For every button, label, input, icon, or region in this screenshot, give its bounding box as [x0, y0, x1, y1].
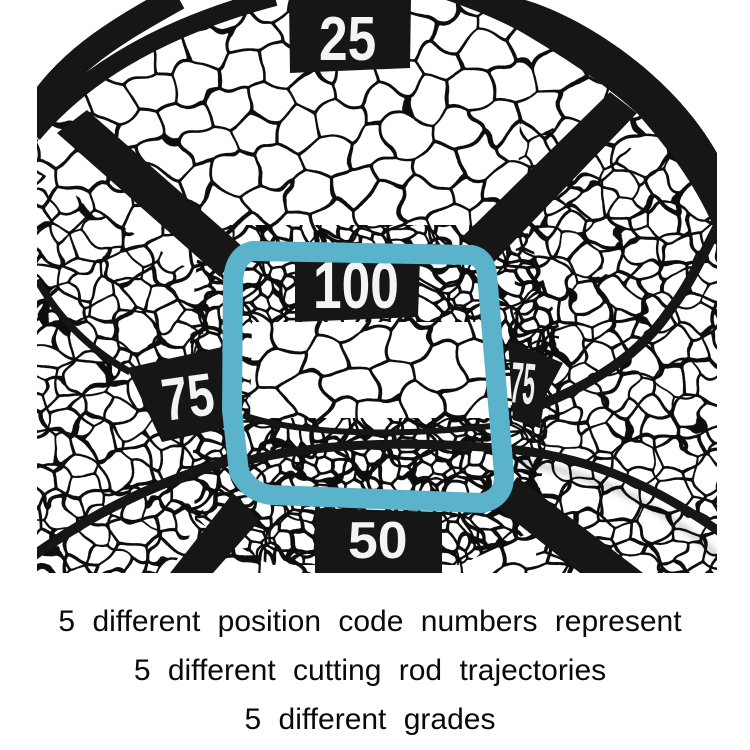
- outer hoop: top left: [30, 0, 275, 134]
- hoop: middle left: [37, 280, 130, 372]
- strap: top right: [462, 92, 637, 263]
- outer hoop: top right: [440, 0, 717, 235]
- label: 25: 25: [319, 5, 376, 74]
- label: 25: [289, 0, 411, 74]
- label: 100: [295, 262, 420, 322]
- label: 75 right: [508, 340, 563, 428]
- strap: bottom right: [497, 477, 643, 573]
- caption line 3: 5 different grades: [245, 703, 495, 736]
- hoop: middle right: [540, 222, 720, 405]
- label: 100: 100: [313, 248, 399, 322]
- caption line 1: 5 different position code numbers represent: [58, 605, 682, 638]
- label: 50: 50: [348, 512, 408, 570]
- dense tangled mesh around target: [190, 225, 560, 565]
- caption line 2: 5 different cutting rod trajectories: [134, 654, 606, 687]
- strap: bottom left: [170, 493, 260, 573]
- strap: top left: [57, 110, 243, 277]
- blue square target frame: [232, 251, 504, 503]
- label: 75 left: 75: [158, 361, 218, 434]
- hoop: lower centre and right: [230, 415, 720, 532]
- net mesh: [37, 0, 717, 573]
- photo: target net: [37, 0, 717, 573]
- label: 75 right: 75: [508, 351, 538, 417]
- hoop: lower left: [33, 460, 232, 556]
- shadow under lower hoop: [520, 462, 717, 555]
- label: 50: [315, 508, 442, 575]
- label: 75 left: [127, 347, 229, 442]
